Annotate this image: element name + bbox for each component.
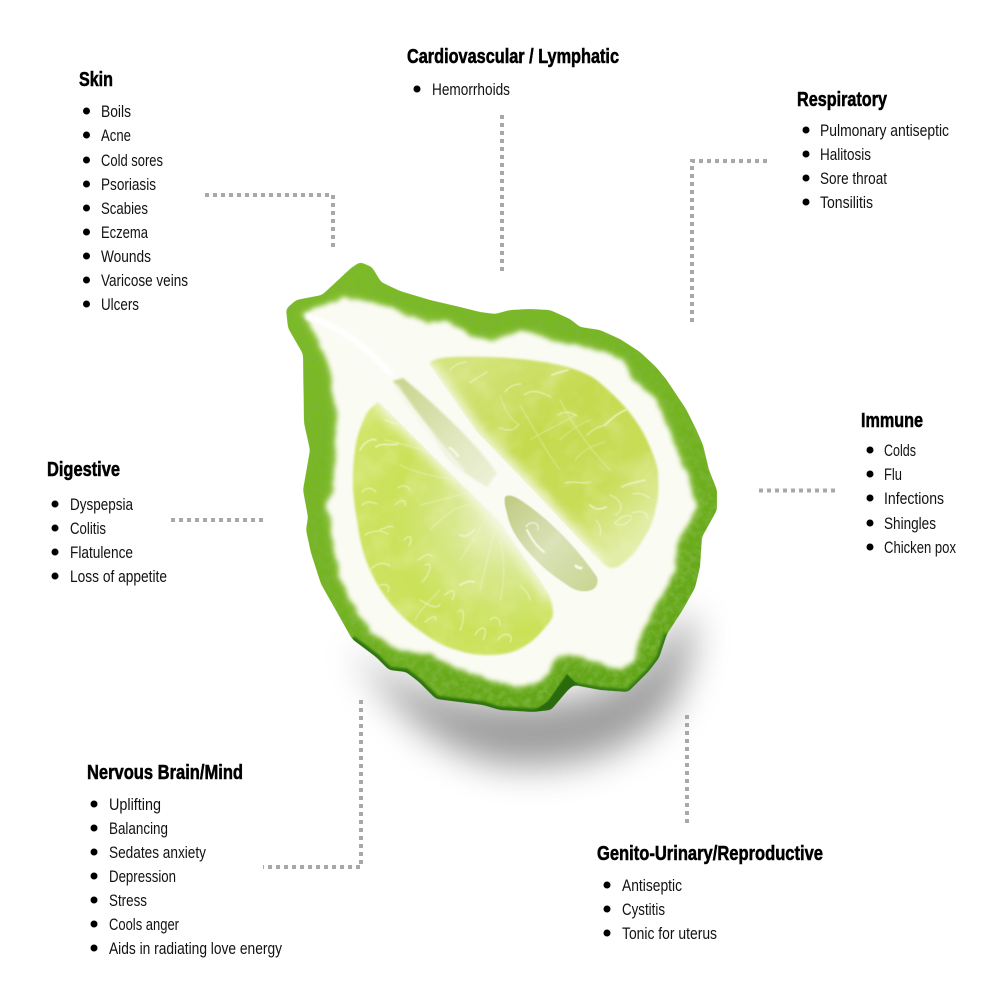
list: nervous [90, 796, 283, 958]
upper right flesh segment [425, 350, 665, 575]
dark underside of rind [352, 634, 667, 712]
upper segment highlights [450, 362, 650, 535]
connector: cardiovascular [500, 115, 504, 272]
list: digestive: Flatulence [70, 544, 133, 562]
list: digestive [52, 496, 167, 586]
list: skin: Scabies [101, 200, 148, 218]
list: cardiovascular: Hemorrhoids [432, 81, 510, 99]
upper juice vesicle [393, 378, 497, 487]
connector: genito-urinary [685, 715, 689, 823]
list: skin: Boils [101, 103, 131, 121]
connector: digestive [171, 518, 263, 522]
list: skin: Wounds [101, 248, 151, 266]
lower segment highlights [360, 420, 530, 642]
lower segment radial streaks [385, 440, 504, 620]
list: skin: Eczema [101, 224, 149, 242]
lower segment blotches [354, 408, 552, 654]
pith fibre highlight [306, 316, 392, 376]
list: digestive: Dyspepsia [70, 496, 134, 514]
upper segment long streaks [500, 395, 610, 470]
list: nervous: Balancing [109, 820, 168, 838]
list: digestive: Loss of appetite [70, 568, 167, 586]
list: respiratory [802, 122, 949, 212]
list: nervous: Sedates anxiety [109, 844, 207, 862]
list: genito-urinary: Tonic for uterus [622, 925, 717, 943]
pith soft green halo [302, 297, 697, 687]
panel: respiratory [797, 89, 949, 212]
list: respiratory: Halitosis [820, 146, 871, 164]
heading: genito-urinary: Genito-Urinary/Reproductive [597, 843, 823, 865]
rind [286, 262, 718, 712]
list: skin [83, 103, 188, 314]
list: genito-urinary: Cystitis [622, 901, 665, 919]
heading: skin: Skin [79, 69, 113, 91]
panel: nervous brain/mind [87, 762, 283, 958]
panel: digestive [47, 459, 167, 586]
dark notch wedge [536, 674, 578, 711]
list: nervous: Stress [109, 892, 147, 910]
lower juice vesicle [505, 495, 598, 591]
fruit drop shadow [352, 614, 693, 766]
list: skin: Acne [101, 127, 131, 145]
heading: nervous: Nervous Brain/Mind [87, 762, 243, 784]
panel: cardiovascular / lymphatic [407, 46, 619, 99]
connector: nervous [263, 700, 361, 867]
connector: respiratory [692, 161, 767, 326]
connector: skin [205, 195, 333, 250]
heading: digestive: Digestive [47, 459, 120, 481]
rind mottled texture [287, 264, 717, 708]
upper segment blotches [452, 364, 656, 538]
list: immune: Flu [884, 466, 902, 484]
white pith [302, 297, 697, 687]
lower segment membrane glow [376, 401, 550, 600]
list: respiratory: Sore throat [820, 170, 887, 188]
list: immune [866, 442, 957, 557]
lower vesicle highlights [526, 523, 581, 568]
list: respiratory: Pulmonary antiseptic [820, 122, 949, 140]
list: genito-urinary: Antiseptic [622, 877, 682, 895]
rind base colour [286, 262, 718, 710]
list: genito-urinary [604, 877, 717, 943]
panel: skin [79, 69, 188, 314]
list: skin: Psoriasis [101, 176, 156, 194]
heading: cardiovascular: Cardiovascular / Lymphatic [407, 46, 619, 68]
list: cardiovascular [414, 81, 510, 99]
list: immune: Chicken pox [884, 539, 957, 557]
list: immune: Shingles [884, 515, 936, 533]
heading: immune: Immune [861, 410, 923, 432]
list: nervous: Aids in radiating love energy [109, 940, 283, 958]
heading: respiratory: Respiratory [797, 89, 888, 111]
bergamot slice illustration [286, 262, 718, 712]
list: immune: Infections [884, 490, 944, 508]
list: nervous: Cools anger [109, 916, 179, 934]
list: nervous: Uplifting [109, 796, 161, 814]
list: digestive: Colitis [70, 520, 106, 538]
list: skin: Varicose veins [101, 272, 188, 290]
upper segment membrane glow [428, 362, 603, 565]
list: skin: Ulcers [101, 296, 139, 314]
list: respiratory: Tonsilitis [820, 194, 873, 212]
upper vesicle highlights [396, 386, 462, 470]
list: skin: Cold sores [101, 152, 163, 170]
panel: genito-urinary / reproductive [597, 843, 823, 943]
list: immune: Colds [884, 442, 916, 460]
lower left flesh segment [350, 400, 560, 660]
connector: immune [759, 488, 835, 492]
list: nervous: Depression [109, 868, 176, 886]
panel: immune [861, 410, 957, 557]
